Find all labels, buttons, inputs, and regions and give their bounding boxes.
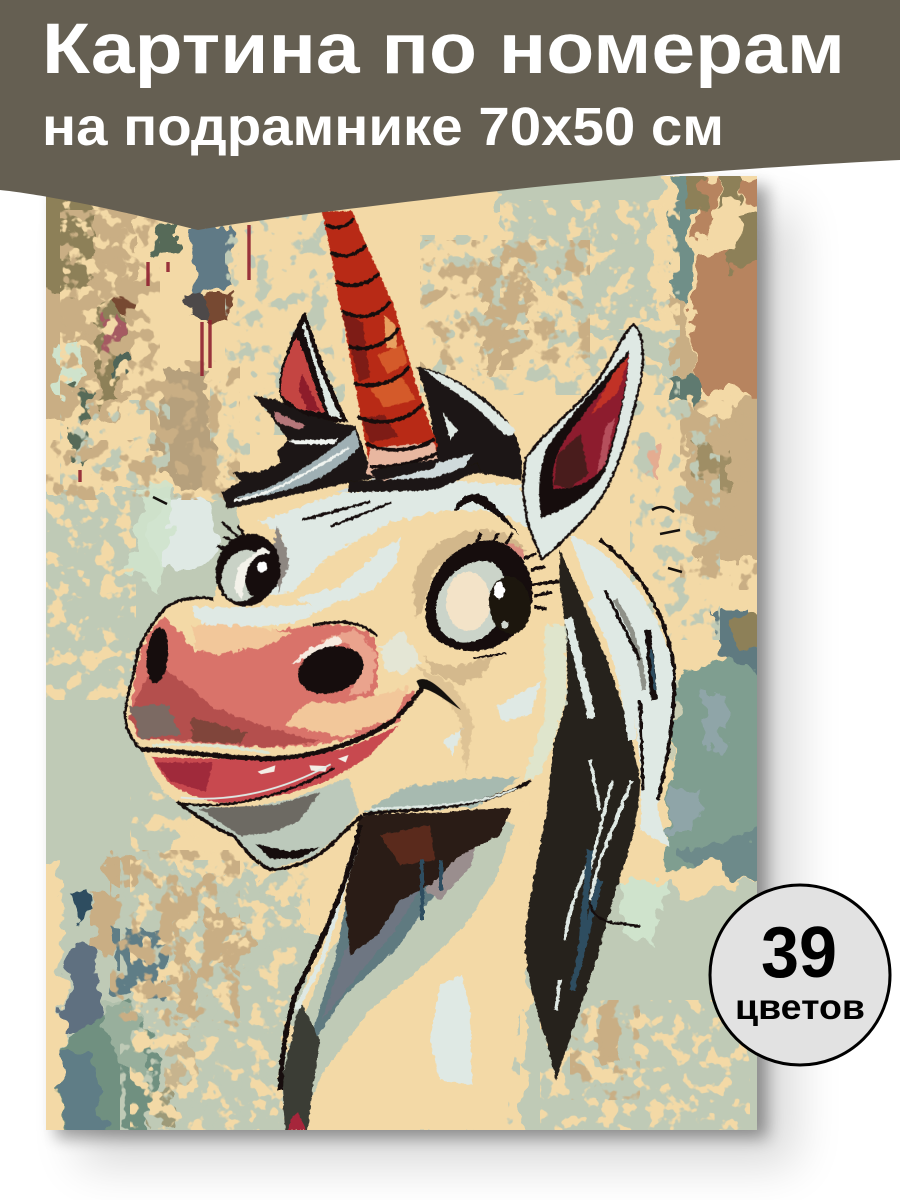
- chin: [177, 777, 531, 870]
- badge caption: цветов: [735, 988, 865, 1027]
- banner: [0, 0, 900, 230]
- canvas drop shadow: [56, 186, 795, 1165]
- nostrils: [146, 626, 364, 694]
- left ear: [279, 313, 349, 422]
- mouth and lower lip: [141, 679, 461, 805]
- neck: [280, 800, 530, 1130]
- title: Картина по номерам: [42, 10, 845, 89]
- snout: [129, 616, 416, 748]
- top hair and forelock: [222, 367, 522, 526]
- badge: 39 colours: [710, 885, 890, 1065]
- snout contour lines: [125, 598, 377, 751]
- unicorn head: [125, 211, 643, 870]
- head silhouette: [126, 580, 568, 868]
- badge number: 39: [761, 913, 837, 993]
- left eye: [215, 520, 282, 607]
- painting background: abstract paint patches: [30, 170, 790, 1150]
- paint speckles: cream: [46, 190, 750, 1130]
- paint drips: [80, 225, 249, 482]
- horn: [322, 211, 438, 481]
- mane on the right: [525, 535, 674, 1080]
- white paint blob on the neck: [430, 975, 472, 1085]
- subtitle: на подрамнике 70х50 см: [42, 97, 724, 157]
- painting canvas: [30, 170, 790, 1150]
- right eye: [425, 494, 559, 658]
- right ear: [523, 325, 643, 559]
- paint speckles: tan: [46, 210, 757, 1100]
- paint speckles: sage: [60, 205, 720, 1130]
- face highlights: [191, 481, 566, 812]
- small dark dashes around the head: [153, 497, 682, 572]
